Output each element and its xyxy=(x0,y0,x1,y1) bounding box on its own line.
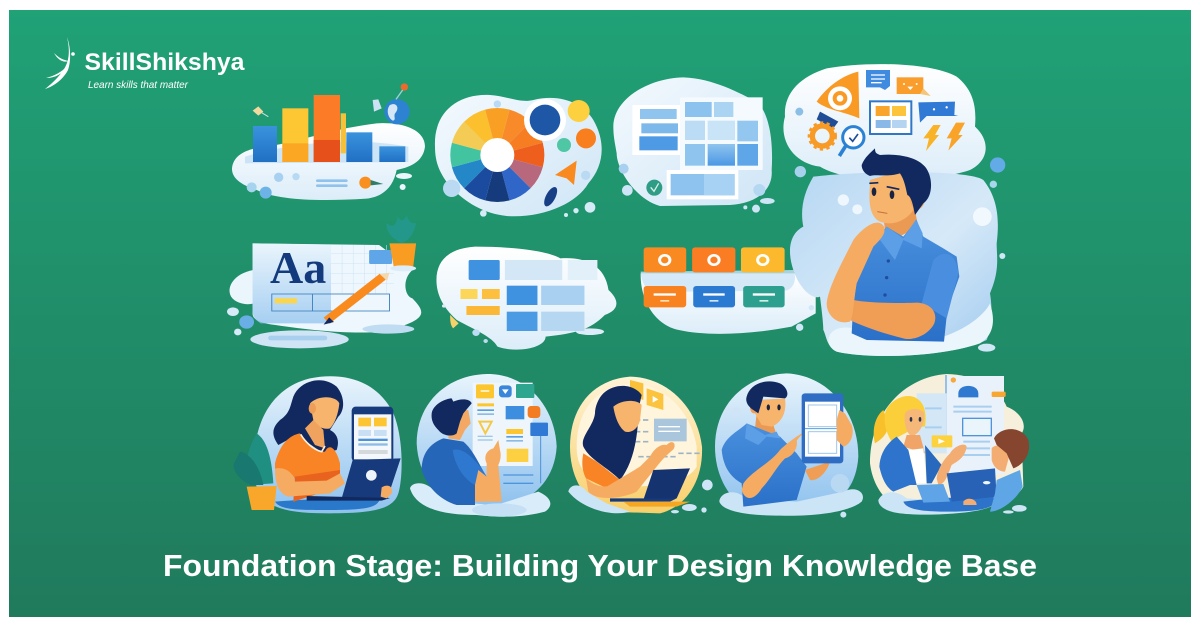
check badge xyxy=(646,180,662,196)
cloud and sheet xyxy=(227,243,421,348)
cloud xyxy=(436,247,616,350)
cloud base xyxy=(568,485,630,513)
Aa typography sample: Aa xyxy=(270,242,326,293)
brand name: SkillShikshya xyxy=(84,49,245,76)
background blob xyxy=(417,374,557,505)
panel: bar chart illustration xyxy=(232,83,425,200)
colour wheel xyxy=(450,108,544,202)
tagline: Learn skills that matter xyxy=(88,79,188,91)
document board xyxy=(917,375,1006,474)
cloud base xyxy=(719,489,863,516)
background blob xyxy=(254,376,402,513)
hand xyxy=(837,410,853,447)
bars xyxy=(253,95,405,162)
panel: woman designing on laptop xyxy=(568,377,706,513)
droplets xyxy=(671,504,706,513)
woman xyxy=(273,380,345,502)
title: Foundation Stage: Building Your Design Knowledge Base xyxy=(163,548,1037,583)
screen elements xyxy=(630,380,702,457)
man xyxy=(722,381,830,507)
panel: buttons illustration xyxy=(641,247,816,334)
design board xyxy=(473,383,548,483)
background blob xyxy=(870,374,1024,513)
background blob xyxy=(715,373,858,510)
cursor arrow xyxy=(555,161,577,185)
neck and head xyxy=(862,148,931,243)
grid card xyxy=(680,97,763,170)
learner child xyxy=(990,429,1029,512)
globe icon xyxy=(373,83,410,124)
tablet xyxy=(352,407,393,462)
blue tag xyxy=(369,250,392,264)
panel: mentor teaching learner xyxy=(870,374,1029,515)
desk xyxy=(275,499,380,510)
colour swatches xyxy=(524,99,596,152)
droplets xyxy=(1003,505,1027,514)
icon buttons xyxy=(644,247,785,272)
cloud xyxy=(613,77,772,206)
crossed arms xyxy=(827,223,935,339)
logo icon: dancer swoosh xyxy=(45,37,75,89)
cloud xyxy=(232,123,425,200)
droplets xyxy=(682,407,849,518)
body cloud xyxy=(790,172,998,356)
laptop xyxy=(307,458,401,501)
potted plant xyxy=(234,433,277,510)
table and devices xyxy=(903,468,997,512)
mentor woman xyxy=(874,396,967,492)
face details xyxy=(872,187,876,196)
panel: colour wheel illustration xyxy=(435,95,602,217)
panel: wireframe blocks illustration xyxy=(436,247,616,350)
panel: woman with laptop and tablet xyxy=(234,376,402,513)
pencil xyxy=(324,273,389,325)
table xyxy=(272,294,389,311)
logo xyxy=(45,37,245,91)
cloud xyxy=(435,95,602,216)
blocks xyxy=(460,260,597,331)
bottom card xyxy=(667,170,738,199)
label buttons xyxy=(644,286,785,307)
panel: thinking designer xyxy=(783,64,1005,356)
hair xyxy=(862,148,931,215)
list card xyxy=(632,105,686,155)
brush tip xyxy=(542,185,560,208)
droplets xyxy=(443,100,595,217)
woman xyxy=(582,386,675,498)
thought cloud xyxy=(783,64,986,180)
small details xyxy=(247,106,412,199)
background blob xyxy=(570,377,702,513)
panel: man pointing at tablet xyxy=(682,373,863,518)
droplets xyxy=(619,164,775,213)
panel: layout grid illustration xyxy=(613,77,775,213)
laptop xyxy=(610,468,690,507)
shirt xyxy=(852,219,959,342)
cloud base xyxy=(410,483,550,517)
man xyxy=(422,398,502,505)
panel: typography illustration xyxy=(227,215,421,348)
panel: man reviewing design board xyxy=(410,374,557,517)
desk cushion xyxy=(472,503,527,517)
tablet xyxy=(802,393,843,463)
floating bubbles xyxy=(795,157,1005,352)
cloud xyxy=(641,273,816,334)
potted plant xyxy=(386,215,416,271)
idea icons xyxy=(795,70,965,156)
